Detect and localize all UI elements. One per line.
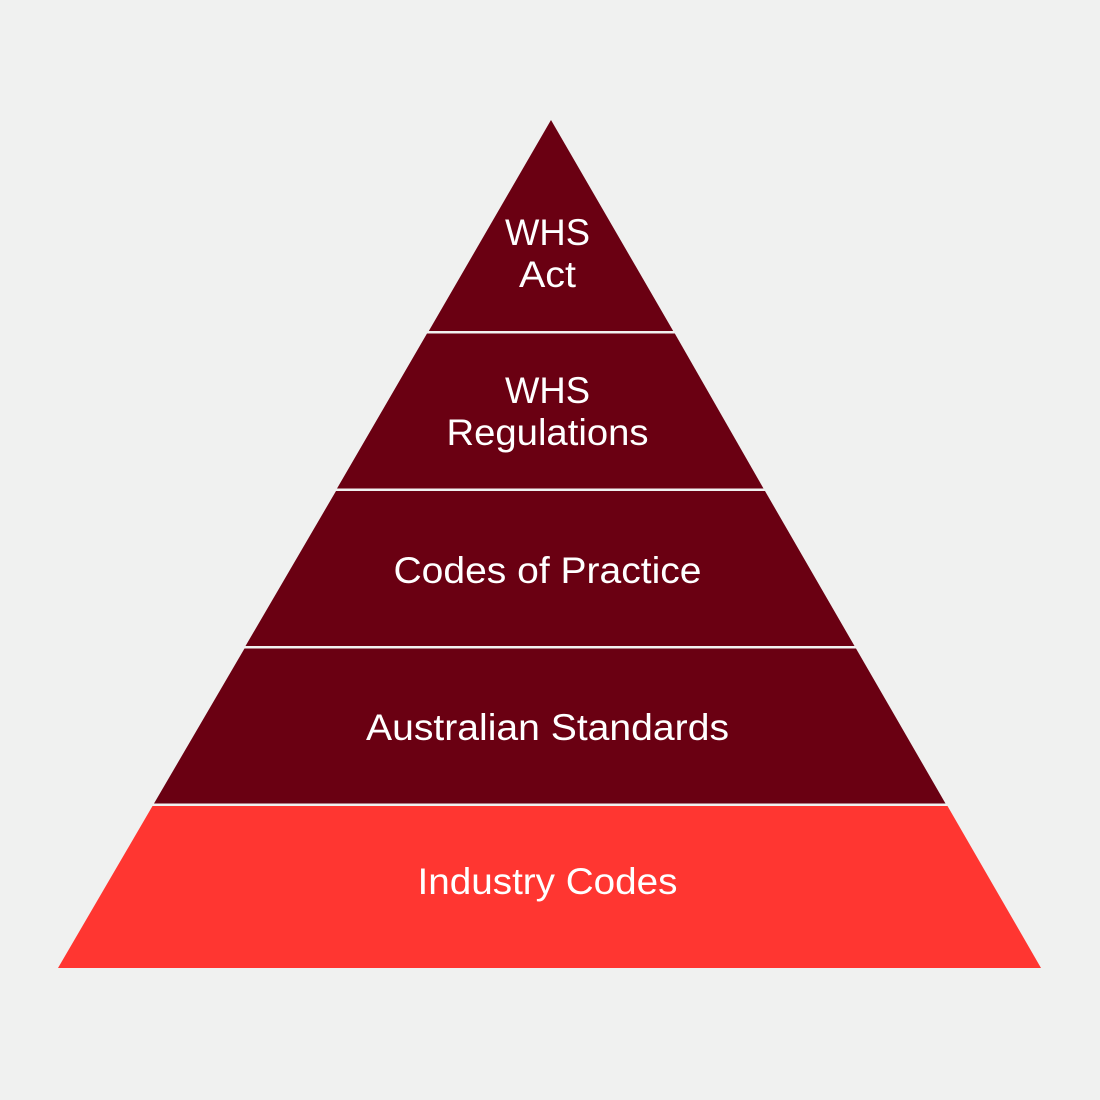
tier 2: WHS Regulations xyxy=(337,334,764,488)
label: WHS Regulations: Regulations xyxy=(446,412,648,453)
label: Codes of Practice: Codes of Practice xyxy=(394,550,702,591)
tier 3: Codes of Practice xyxy=(246,491,854,646)
label: WHS Act: Act xyxy=(519,254,577,295)
tier 5: Industry Codes xyxy=(58,806,1041,968)
label: WHS Regulations: WHS xyxy=(505,370,590,411)
label: WHS Regulations xyxy=(446,370,648,453)
tier 4: Australian Standards xyxy=(154,648,946,804)
label: WHS Act: WHS xyxy=(505,212,590,253)
label: WHS Act xyxy=(505,212,590,295)
label: Industry Codes: Industry Codes xyxy=(418,861,678,902)
tier 1: WHS Act xyxy=(429,120,673,331)
label: Australian Standards: Australian Standards xyxy=(366,707,729,748)
